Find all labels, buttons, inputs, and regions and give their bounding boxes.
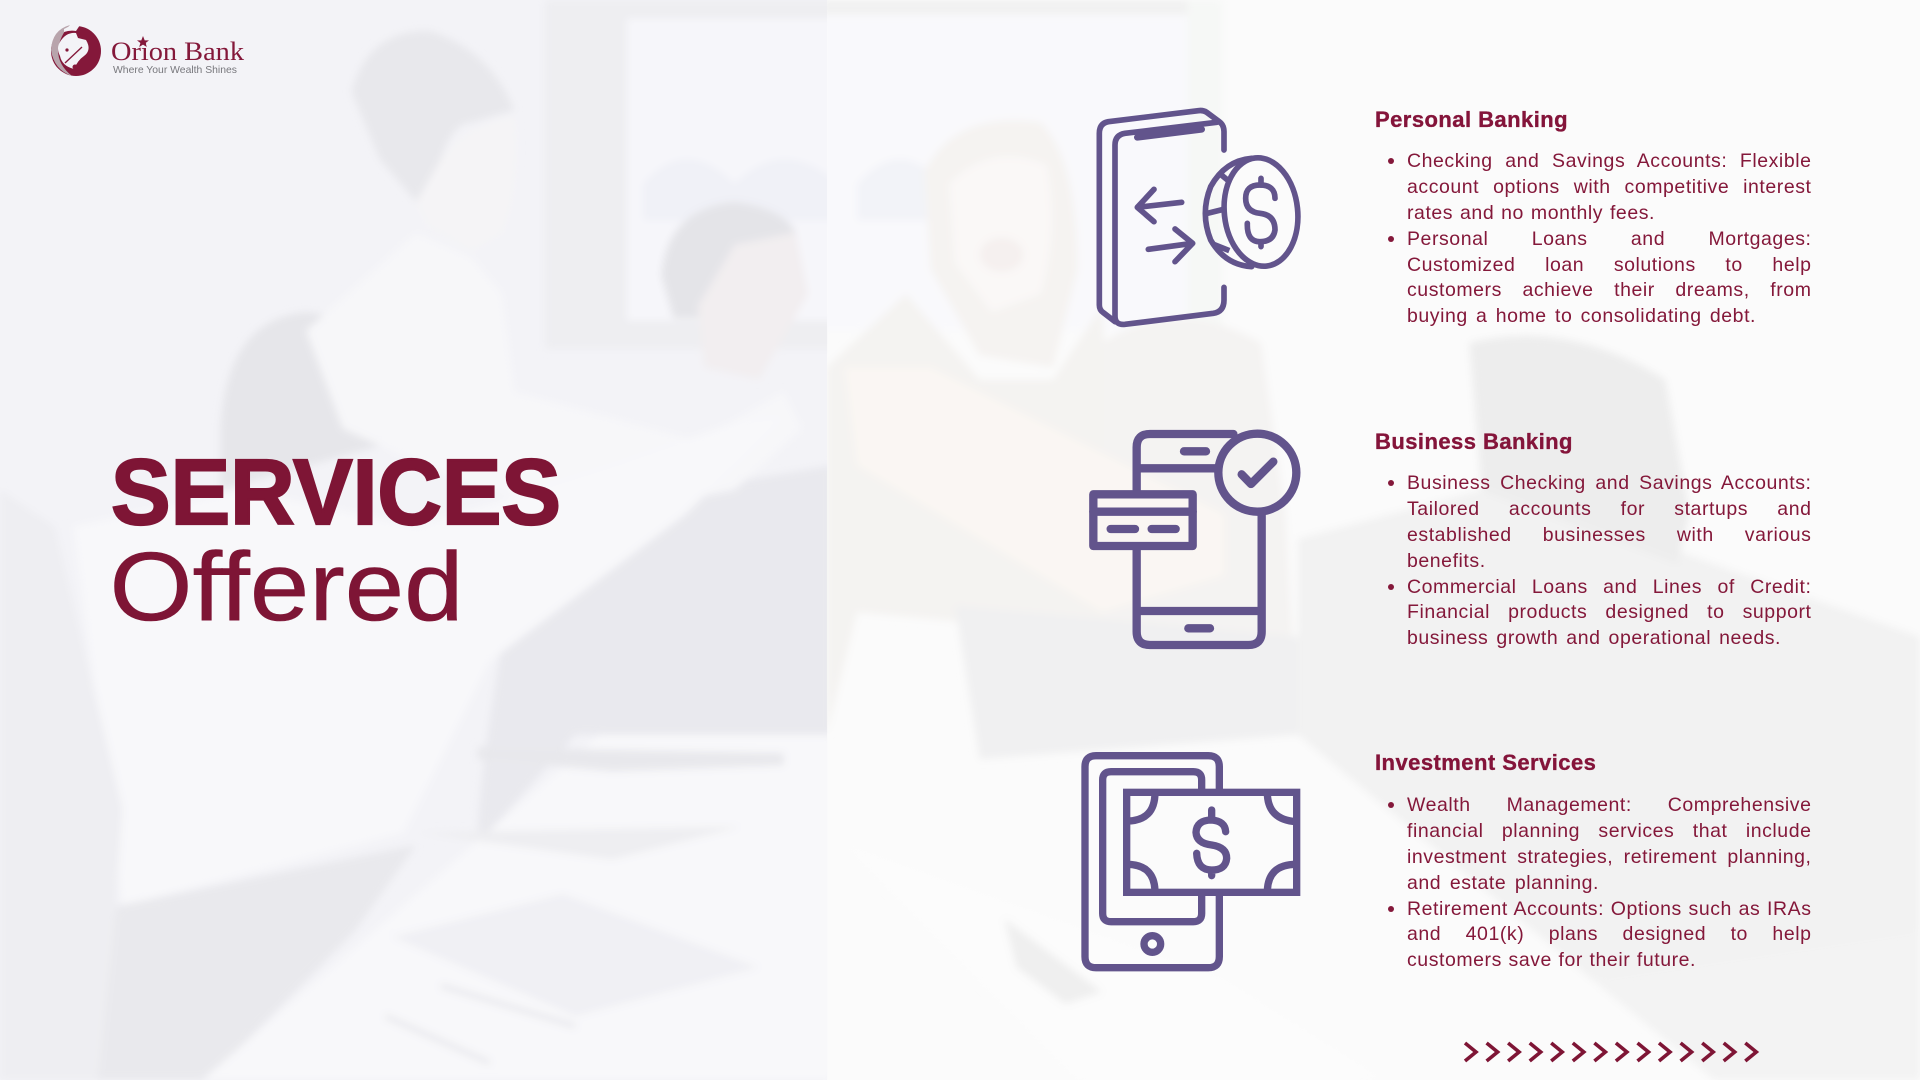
list item: commercial loans: Financial products designed to support — [1407, 601, 1812, 623]
heading: Investment Services: Investment Services — [1375, 750, 1596, 775]
panel: Business Banking — [1375, 429, 1812, 649]
heading: Business Banking: Business Banking — [1375, 429, 1573, 454]
list item: business accounts: Business Checking and Savings Accounts: — [1407, 472, 1812, 494]
logo tagline: Where Your Wealth Shines — [113, 64, 237, 76]
list item: business accounts: Tailored accounts for startups and — [1407, 498, 1812, 520]
list item: checking and savings: rates and no monthly fees. — [1407, 202, 1655, 224]
list item: personal loans: customers achieve their dreams, from — [1407, 279, 1812, 301]
list item: personal loans: buying a home to consolidating debt. — [1407, 305, 1756, 327]
logo mark — [51, 25, 101, 76]
list item: checking and savings: account options with competitive interest — [1407, 176, 1812, 198]
title: Offered: Offered — [110, 532, 464, 640]
list item: commercial loans: business growth and operational needs. — [1407, 627, 1781, 649]
list item: wealth management — [1388, 794, 1812, 894]
list item: retirement accounts: and 401(k) plans designed to help — [1407, 923, 1812, 945]
list item: personal loans — [1388, 228, 1812, 327]
list item: commercial loans: Commercial Loans and Lines of Credit: — [1407, 576, 1812, 598]
heading: Personal Banking: Personal Banking — [1375, 107, 1568, 132]
title — [110, 440, 561, 640]
list item: checking and savings: Checking and Savings Accounts: Flexible — [1407, 150, 1812, 172]
list item: retirement accounts: Retirement Accounts: Options such as IRAs — [1407, 898, 1812, 920]
logo name: Orion Bank — [111, 37, 244, 66]
list item: retirement accounts: customers save for their future. — [1407, 949, 1696, 971]
title: SERVICES: SERVICES — [111, 440, 561, 544]
list item: commercial loans — [1388, 576, 1812, 649]
logo — [51, 25, 244, 76]
list item: personal loans: Customized loan solutions to help — [1407, 254, 1812, 276]
icon: phone with money transfer and coin — [1096, 108, 1301, 328]
panel: Investment Services — [1375, 750, 1812, 971]
list item: personal loans: Personal Loans and Mortgages: — [1407, 228, 1812, 250]
list item: wealth management: and estate planning. — [1407, 872, 1599, 894]
panel: Personal Banking — [1375, 107, 1812, 327]
icon: phone with banknote — [1081, 752, 1300, 972]
list item: checking and savings — [1388, 150, 1812, 224]
list item: retirement accounts — [1388, 898, 1812, 971]
list item: business accounts: established businesses with various — [1407, 524, 1812, 546]
list item: business accounts — [1388, 472, 1812, 572]
list item: wealth management: investment strategies, retirement planning, — [1407, 846, 1812, 868]
list item: wealth management: financial planning services that include — [1407, 820, 1812, 842]
arrow: chevron row — [1464, 1042, 1759, 1062]
list item: business accounts: benefits. — [1407, 550, 1486, 572]
list item: wealth management: Wealth Management: Comprehensive — [1407, 794, 1812, 816]
logo star — [137, 36, 149, 47]
icon: phone with card and check mark — [1089, 430, 1300, 650]
